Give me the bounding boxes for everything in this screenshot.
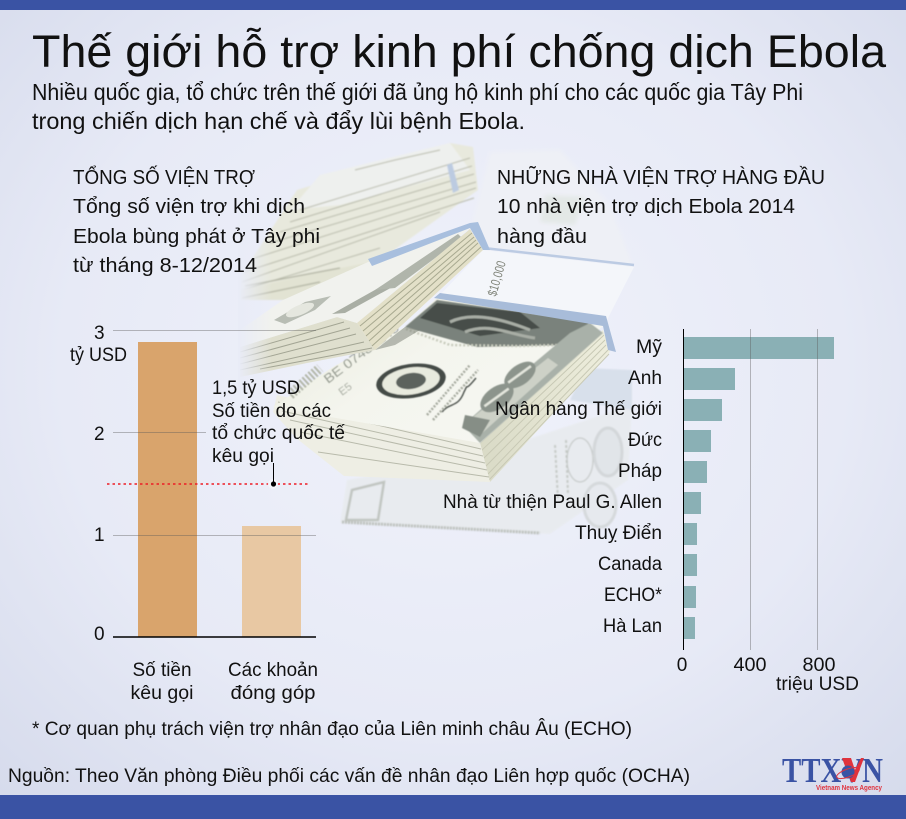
bar chart: top donors: [443, 329, 859, 695]
left fade over stacks: [238, 170, 272, 390]
band text: $10,000: [484, 259, 509, 298]
right heading: top donors: 10 nhà viện trợ dịch Ebola 2014: [497, 195, 795, 218]
illustration: stacks of dollar bills: [238, 143, 634, 534]
signature: [442, 378, 476, 412]
bars: [684, 337, 834, 639]
stack shadow on bill: [375, 327, 420, 350]
logo: TTXVN: TTXVN: [782, 751, 883, 790]
y axis labels: 2: [94, 424, 105, 445]
category labels: đóng góp: [230, 683, 316, 704]
x axis labels: 800: [802, 655, 836, 676]
left heading: total aid: [73, 165, 320, 277]
bill serial and border: [290, 300, 603, 443]
logo: TTXVN: Vietnam News Agency: [816, 785, 882, 792]
seal: [374, 359, 448, 403]
upper stack: face: [240, 228, 470, 347]
top blurred stack: [240, 143, 478, 300]
y axis labels: 0: [94, 624, 105, 645]
donor labels: [443, 337, 663, 637]
right heading: top donors: [497, 166, 825, 248]
footnote: * Cơ quan phụ trách viện trợ nhân đạo của Liên minh châu Âu (ECHO): [32, 718, 632, 740]
threshold marker: [268, 463, 278, 489]
left heading: total aid: Ebola bùng phát ở Tây phi: [73, 225, 320, 248]
donor labels: Mỹ: [636, 337, 663, 358]
title: Thế giới hỗ trợ kinh phí chống dịch Ebola: [32, 26, 887, 77]
right heading: top donors: NHỮNG NHÀ VIỆN TRỢ HÀNG ĐẦU: [497, 166, 825, 189]
callout: kêu gọi: [212, 446, 274, 467]
bottom stack: side pages: [480, 330, 610, 482]
bar: contributions: [242, 526, 301, 637]
callout: Số tiền do các: [212, 401, 331, 422]
source: Nguồn: Theo Văn phòng Điều phối các vấn đề nhân đạo Liên hợp quốc (OCHA): [8, 766, 690, 787]
callout: tổ chức quốc tế: [212, 423, 345, 444]
right portrait frame: [463, 323, 603, 443]
bottom stack: front pages: [273, 395, 490, 482]
left heading: total aid: từ tháng 8-12/2014: [73, 254, 257, 277]
callout: [212, 378, 345, 467]
portrait: [405, 300, 590, 347]
threshold line: [107, 483, 310, 485]
y axis labels: 1: [94, 525, 105, 546]
y axis labels: [70, 323, 127, 645]
bottom stack: blue band: [434, 293, 616, 352]
bottom loose bill: [340, 368, 632, 534]
upper stack: pages right: [357, 229, 483, 350]
bill serial and border: BE 07485248: [321, 320, 402, 386]
x axis labels: 400: [734, 655, 766, 676]
intro text: [32, 79, 803, 134]
callout: 1,5 tỷ USD: [212, 378, 300, 399]
right heading: top donors: hàng đầu: [497, 225, 587, 248]
donor labels: Canada: [598, 554, 662, 575]
bill serial and border: E5: [337, 381, 355, 398]
intro text: Nhiều quốc gia, tổ chức trên thế giới đã ủng hộ kinh phí cho các quốc gia Tây Phi: [32, 79, 803, 105]
left heading: total aid: Tổng số viện trợ khi dịch: [73, 195, 305, 218]
x axis labels: [677, 655, 859, 695]
bar chart: total aid: [70, 323, 345, 704]
donor labels: Thuỵ Điển: [575, 523, 662, 544]
donor labels: Pháp: [618, 461, 662, 482]
donor labels: Anh: [628, 368, 662, 389]
donor labels: Ngân hàng Thế giới: [495, 399, 662, 420]
bottom band: [0, 795, 906, 819]
upper stack: pages left: [240, 317, 375, 377]
y axis labels: 3: [94, 323, 105, 344]
denomination numerals: [475, 378, 519, 418]
category labels: kêu gọi: [130, 683, 194, 704]
middle-bill white top block: [437, 250, 634, 320]
donor labels: ECHO*: [604, 585, 663, 606]
left heading: total aid: TỔNG SỐ VIỆN TRỢ: [73, 165, 255, 189]
category labels: Các khoản: [228, 660, 318, 681]
donor labels: Đức: [628, 430, 662, 451]
category labels: Số tiền: [132, 660, 192, 681]
intro text: trong chiến dịch hạn chế và đẩy lùi bệnh Ebola.: [32, 108, 525, 134]
donor labels: Hà Lan: [603, 616, 662, 637]
donor labels: Nhà từ thiện Paul G. Allen: [443, 492, 662, 513]
upper stack: blue band: [368, 222, 490, 266]
bar: appealed: [138, 342, 197, 637]
top band: [0, 0, 906, 10]
bottom stack: bill face: [273, 298, 607, 443]
category labels: [130, 660, 318, 704]
x axis labels: triệu USD: [776, 674, 859, 695]
y axis labels: tỷ USD: [70, 345, 127, 366]
x axis labels: 0: [677, 655, 687, 676]
right pale bill behind: [472, 150, 634, 268]
